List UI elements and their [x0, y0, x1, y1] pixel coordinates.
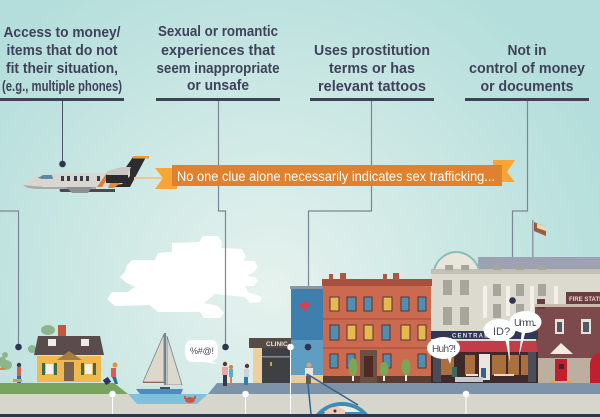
umm speech bubble: Umm...: [514, 318, 537, 329]
heading: access to money: Access to money/: [4, 24, 121, 41]
heading: not in control: [469, 42, 586, 95]
brick townhouse: [322, 273, 432, 383]
heading: prostitution terms: terms or has: [329, 60, 415, 77]
clinic: CLINIC: [266, 341, 288, 348]
white pin: tower: [287, 344, 294, 414]
person under magnifier: [305, 362, 313, 384]
heading: sexual or romantic experiences: seem inappropriate: [156, 60, 280, 77]
walker with dog: [13, 363, 22, 383]
heading: sexual or romantic experiences: experiences that: [161, 42, 275, 59]
fire station: [535, 292, 600, 383]
clinic: [249, 338, 291, 383]
heading: not in control: control of money: [469, 60, 586, 77]
heading: prostitution terms: relevant tattoos: [318, 78, 426, 95]
id speech bubble: [484, 319, 516, 362]
ribbon banner: No one clue alone necessarily indicates sex trafficking...: [177, 168, 495, 184]
heading: not in control: Not in: [508, 42, 546, 59]
grass: [0, 383, 128, 394]
couple: [222, 362, 233, 386]
heading: sexual or romantic experiences: [156, 23, 280, 94]
huh speech bubble: [427, 337, 460, 364]
cursing speech bubble: [185, 340, 219, 364]
bottom dark band: [0, 414, 600, 417]
white pin: cafe: [463, 391, 469, 414]
heading: access to money: fit their situation,: [6, 60, 118, 77]
banner string: [134, 177, 166, 179]
heading: access to money: (e.g., multiple phones): [2, 78, 122, 95]
tree at left edge: [0, 352, 12, 370]
central cafe: [431, 331, 538, 383]
connector lines: [0, 101, 528, 347]
umm speech bubble: [510, 311, 542, 356]
heading: not in control: or documents: [480, 78, 574, 95]
glass tower with red cross: [289, 286, 323, 383]
heading: prostitution terms: Uses prostitution: [314, 42, 430, 59]
pedestrian: [244, 364, 249, 385]
heading: sexual or romantic experiences: or unsafe: [187, 77, 249, 94]
house: [28, 325, 104, 382]
airplane: [23, 156, 149, 193]
id speech bubble: ID?: [493, 326, 510, 338]
flag: [532, 220, 546, 257]
grand central building: [431, 252, 600, 383]
sailboat: [136, 333, 183, 394]
huh speech bubble: Huh?!: [432, 344, 456, 355]
white pin: left: [109, 391, 116, 414]
cloud: [107, 236, 262, 318]
heading: prostitution terms: [314, 42, 430, 95]
white pin: centre: [242, 391, 249, 414]
central cafe: CENTRAL: [452, 334, 489, 340]
pavement: [208, 383, 600, 394]
crab: [184, 396, 196, 403]
cursing speech bubble: %#@!: [190, 346, 214, 356]
traveller with suitcase: [103, 362, 118, 385]
heading: sexual or romantic experiences: Sexual or romantic: [158, 23, 278, 40]
heading: access to money: [2, 24, 122, 95]
navy marker dots: [15, 161, 516, 350]
ribbon banner: [155, 160, 515, 189]
water: [128, 394, 208, 404]
magnifier lens: [307, 374, 365, 414]
ground strip: [0, 394, 600, 414]
heading: access to money: items that do not: [6, 42, 118, 59]
heading underlines: [0, 98, 589, 101]
